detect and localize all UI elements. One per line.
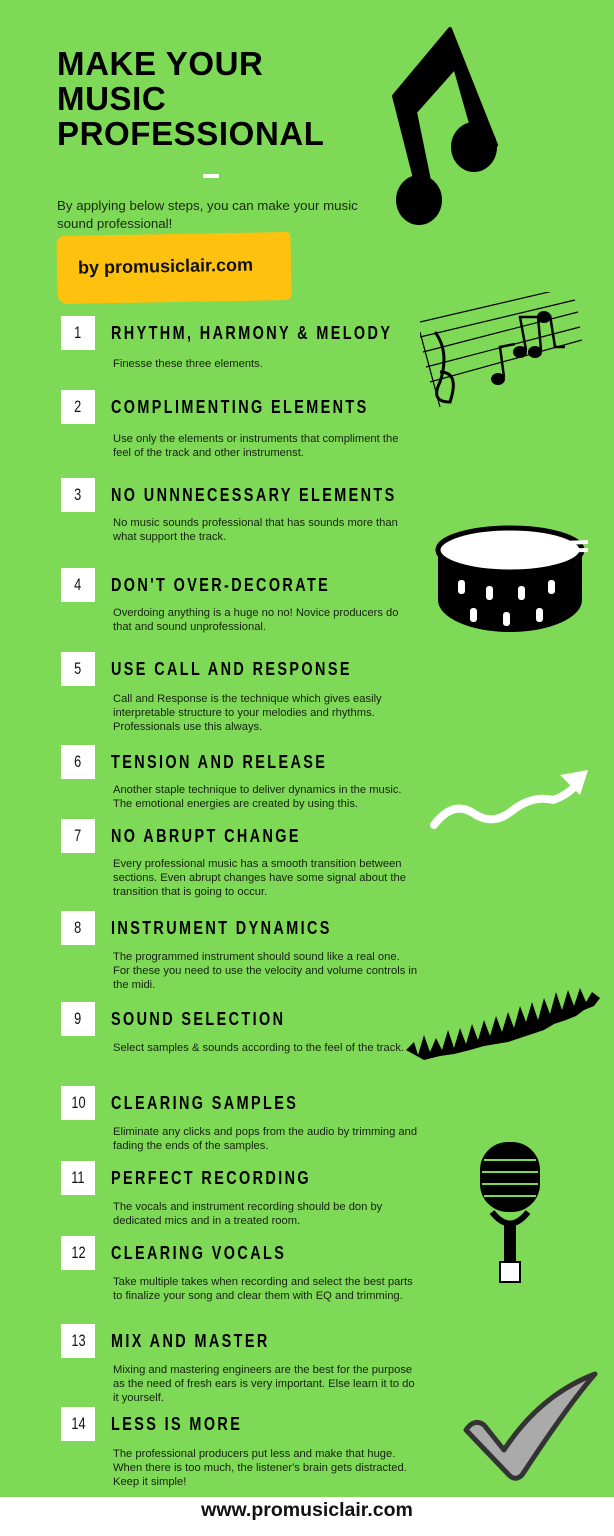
item 10 [61, 1086, 417, 1152]
item 1: RHYTHM, HARMONY & MELODY [111, 323, 392, 343]
item 13: MIX AND MASTER [111, 1331, 270, 1351]
item 10: Eliminate any clicks and pops from the audio by trimming and fading the ends of the samples. [113, 1126, 417, 1152]
item 8: 8 [74, 918, 82, 937]
item 2 [61, 390, 398, 459]
item 11: The vocals and instrument recording should be don by dedicated mics and in a treated room. [113, 1201, 382, 1227]
item 14 [61, 1407, 407, 1488]
item 6: Another staple technique to deliver dynamics in the music. The emotional energies are created by using this. [113, 784, 402, 810]
item 11 [61, 1161, 382, 1227]
item 5: 5 [74, 659, 82, 678]
item 10: 10 [71, 1093, 85, 1112]
title: MAKE YOUR [57, 45, 263, 82]
item 10: CLEARING SAMPLES [111, 1093, 298, 1113]
icon: drum [436, 526, 588, 632]
item 7: 7 [74, 826, 82, 845]
item 9: SOUND SELECTION [111, 1009, 285, 1029]
item 13 [61, 1324, 415, 1404]
title [57, 45, 325, 152]
subtitle: By applying below steps, you can make your music sound professional! [57, 198, 358, 231]
item 6: 6 [74, 752, 82, 771]
icon: music note [392, 26, 498, 225]
item 5: Call and Response is the technique which gives easily interpretable structure to your melodies and rhythms. Professionals use this always. [113, 693, 382, 733]
icon: staff [420, 292, 582, 408]
item 11: 11 [71, 1168, 85, 1187]
footer: www.promusiclair.com [201, 1499, 413, 1521]
item 14: The professional producers put less and make that huge. When there is too much, the listener's brain gets distracted. Keep it simple! [113, 1448, 407, 1488]
item 3 [61, 478, 398, 543]
item 1 [61, 316, 392, 370]
item 6 [61, 745, 402, 810]
item 8 [61, 911, 417, 991]
item 12: 12 [71, 1243, 85, 1262]
item 5 [61, 652, 382, 733]
item 9 [61, 1002, 404, 1054]
item 12 [61, 1236, 413, 1302]
item 1: Finesse these three elements. [113, 358, 263, 370]
item 4 [61, 568, 398, 633]
item 11: PERFECT RECORDING [111, 1168, 311, 1188]
icon: microphone [480, 1142, 540, 1283]
item 2: 2 [74, 397, 82, 416]
item 7 [61, 819, 406, 898]
title: MUSIC [57, 80, 166, 117]
dash [203, 174, 219, 178]
item 9: Select samples & sounds according to the feel of the track. [113, 1042, 404, 1054]
icon: wavy arrow [430, 770, 588, 829]
item 7: NO ABRUPT CHANGE [111, 826, 301, 846]
item 13: Mixing and mastering engineers are the best for the purpose as the need of fresh ears is very important. Else learn it to do it yourself. [113, 1364, 415, 1404]
item 14: LESS IS MORE [111, 1414, 242, 1434]
icon: checkmark [463, 1372, 598, 1481]
item 14: 14 [71, 1414, 85, 1433]
badge [56, 232, 292, 304]
item 7: Every professional music has a smooth transition between sections. Even abrupt changes have some signal about the transition that is going to occur. [113, 858, 406, 898]
item 8: INSTRUMENT DYNAMICS [111, 918, 332, 938]
item 4: DON'T OVER-DECORATE [111, 575, 330, 595]
item 4: 4 [74, 575, 82, 594]
item 2: COMPLIMENTING ELEMENTS [111, 397, 369, 417]
item 5: USE CALL AND RESPONSE [111, 659, 352, 679]
item 3: No music sounds professional that has sounds more than what support the track. [113, 517, 398, 543]
icon: waveform [406, 988, 600, 1060]
item 1: 1 [74, 323, 82, 342]
item 12: Take multiple takes when recording and select the best parts to finalize your song and clear them with EQ and trimming. [113, 1276, 413, 1302]
item 9: 9 [74, 1009, 82, 1028]
badge: by promusiclair.com [78, 255, 253, 278]
item 13: 13 [71, 1331, 85, 1350]
item 3: 3 [74, 485, 82, 504]
item 8: The programmed instrument should sound like a real one. For these you need to use the velocity and volume controls in the midi. [113, 951, 417, 991]
item 12: CLEARING VOCALS [111, 1243, 286, 1263]
item 2: Use only the elements or instruments that compliment the feel of the track and other instrumenst. [113, 433, 398, 459]
item 6: TENSION AND RELEASE [111, 752, 327, 772]
item 4: Overdoing anything is a huge no no! Novice producers do that and sound unprofessional. [113, 607, 398, 633]
title: PROFESSIONAL [57, 115, 325, 152]
item 3: NO UNNNECESSARY ELEMENTS [111, 485, 397, 505]
